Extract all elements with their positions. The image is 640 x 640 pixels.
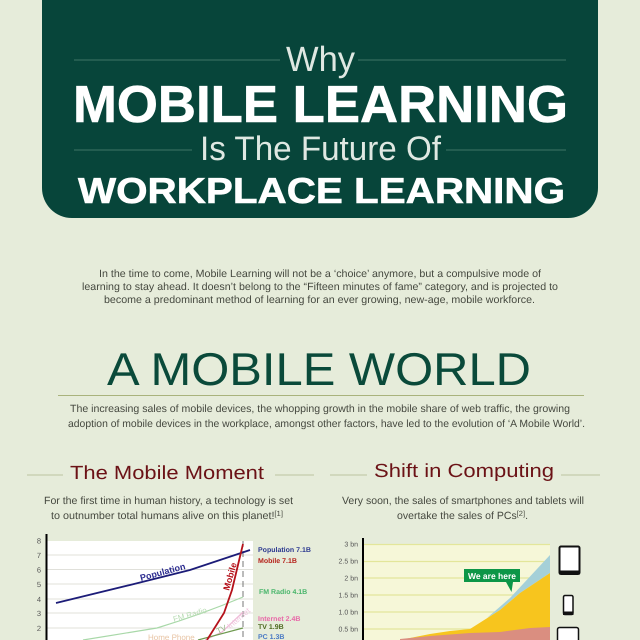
line chart: mobile vs population: FM Radio: [172, 606, 208, 624]
title: Is The Future Of: Is The Future Of: [200, 130, 442, 168]
text block: introduction: learning to stay ahead. It doesn’t belong to the “Fifteen minutes of fame” category, and is projected to: [82, 281, 558, 293]
title: Mobile Learning: MOBILE LEARNING: [73, 76, 568, 134]
text block: mobile moment description: [1]: [274, 509, 283, 518]
heading: A Mobile World: A MOBILE WORLD: [107, 343, 531, 395]
series: tablets: [487, 555, 550, 618]
line chart: mobile vs population: Population: [139, 561, 186, 583]
axis labels: 7: [37, 551, 41, 560]
series: population: [56, 550, 250, 603]
text block: mobile world description: [68, 403, 585, 430]
axis labels: 3: [37, 609, 41, 618]
line chart: mobile vs population: Internet: [226, 606, 253, 631]
axis labels: 1.5 bn: [339, 592, 358, 600]
axis labels: 6: [37, 566, 41, 574]
panel: title banner: [42, 0, 598, 218]
axis labels: 2 bn: [344, 574, 358, 582]
line chart: mobile vs population: Mobile: [221, 561, 239, 592]
text block: shift in computing description: .: [525, 510, 528, 522]
legend labels: FM Radio 4.1B: [259, 588, 307, 596]
line chart: mobile vs population: TV: [215, 623, 229, 636]
text block: shift in computing description: Very soon, the sales of smartphones and tablets will: [342, 495, 584, 507]
text block: introduction: In the time to come, Mobile Learning will not be a ‘choice’ anymore, but a compulsive mode of: [99, 268, 541, 280]
axis labels: [339, 540, 358, 634]
text block: introduction: [82, 268, 558, 306]
text block: mobile moment description: For the first time in human history, a technology is set: [44, 495, 293, 507]
series: internet and TV: [205, 612, 243, 640]
text block: mobile world description: adoption of mobile devices in the workplace, amongst other factors, have led to the evolution of ‘A Mobile World’.: [68, 418, 585, 430]
series: mobile: [207, 544, 243, 640]
axis labels: 3 bn: [344, 540, 358, 548]
axis labels: 0.5 bn: [339, 626, 358, 634]
legend labels: [258, 546, 311, 640]
series: smartphones: [400, 573, 550, 640]
legend labels: TV 1.9B: [258, 624, 284, 631]
title: Workplace Learning: WORKPLACE LEARNING: [78, 170, 565, 211]
axis labels: 8: [37, 536, 41, 546]
text block: mobile moment description: to outnumber total humans alive on this planet!: [51, 510, 269, 522]
icon: smartphone: [563, 596, 574, 615]
area chart: device sales: [339, 538, 550, 640]
legend labels: Internet 2.4B: [258, 616, 300, 623]
text block: mobile moment description: [44, 495, 293, 522]
icon: monitor: [558, 628, 578, 640]
series: FM radio: [83, 597, 243, 640]
text block: shift in computing description: overtake the sales of PCs: [397, 510, 517, 522]
heading: The Mobile Moment: The Mobile Moment: [70, 463, 265, 484]
axis labels: 1.0 bn: [339, 608, 358, 616]
line chart: mobile vs population: [37, 534, 311, 640]
legend labels: Population 7.1B: [258, 546, 311, 554]
axis labels: 5: [37, 580, 41, 589]
callout: we are here: We are here: [468, 571, 516, 581]
text block: shift in computing description: [2]: [517, 509, 525, 518]
text block: introduction: become a predominant method of learning for an ever growing, new-age, mobile workforce.: [104, 294, 535, 306]
axis labels: 4: [37, 595, 41, 604]
icon: tablet: [559, 546, 580, 574]
axis labels: 2.5 bn: [339, 558, 358, 566]
text block: mobile world description: The increasing sales of mobile devices, the whopping growth in the mobile share of web traffic, the growing: [70, 403, 570, 415]
callout: we are here: [464, 569, 520, 592]
text block: shift in computing description: [342, 495, 584, 522]
series: PCs: [400, 627, 550, 640]
title: Why: Why: [286, 40, 355, 79]
axis labels: 2: [37, 624, 41, 633]
legend labels: Mobile 7.1B: [258, 557, 297, 565]
heading: Shift in Computing: Shift in Computing: [374, 461, 554, 482]
axis labels: [37, 536, 41, 633]
